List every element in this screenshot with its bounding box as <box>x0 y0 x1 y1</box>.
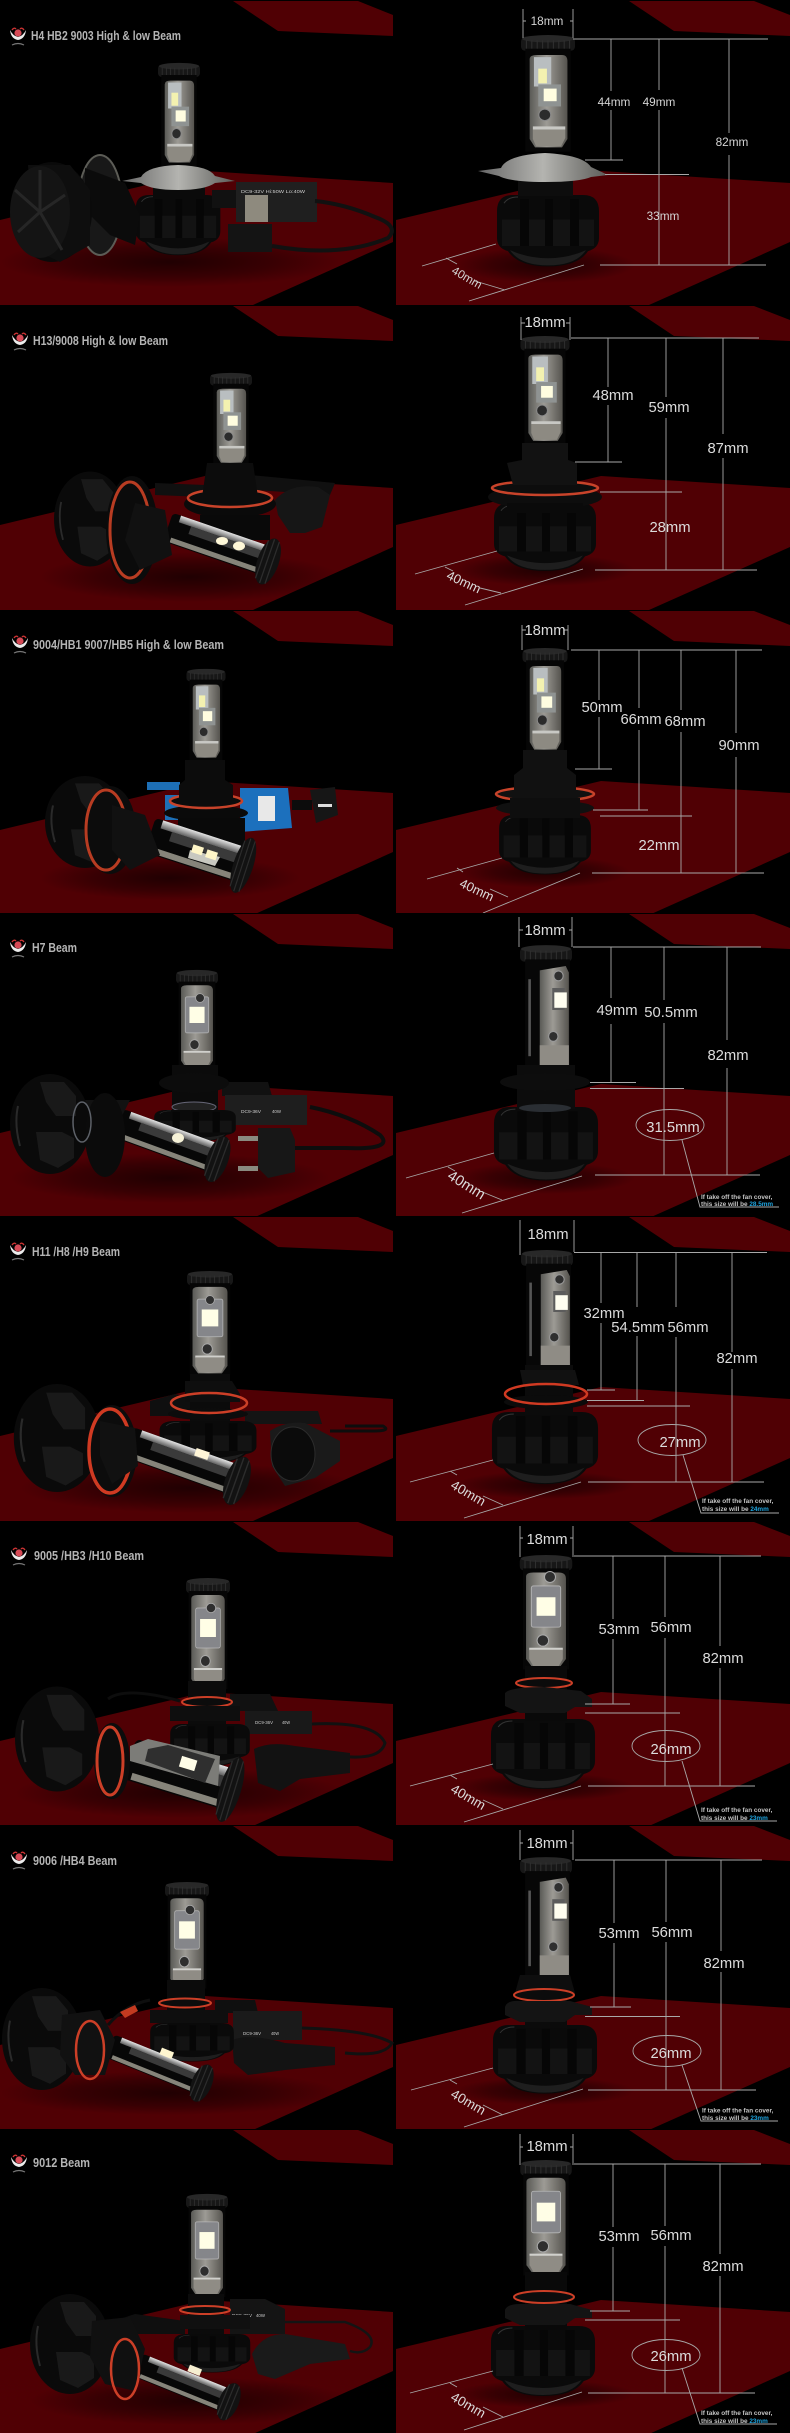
row 5 dimension lines and labels: 18mm <box>527 1227 569 1243</box>
row 5 dimension lines and labels <box>410 1220 779 1518</box>
row 4 dimension lines and labels: 31.5mm <box>646 1120 700 1136</box>
row 5 right background <box>393 1216 790 1521</box>
row 4 dimension lines and labels: 18mm <box>524 923 566 939</box>
row 4 dimension lines and labels <box>406 917 779 1213</box>
row 2 dimension lines and labels: 59mm <box>648 400 690 416</box>
row 3 heading <box>12 636 224 653</box>
row 7: 9006/HB4 <box>0 1825 790 2130</box>
row 3 dimension lines and labels: 66mm <box>620 712 662 728</box>
row 3 left background <box>0 610 393 915</box>
row 8 dimension lines and labels: 82mm <box>702 2259 744 2275</box>
row 7 dimension bulb <box>455 1857 635 2105</box>
row 1 dimension lines and labels: 49mm <box>643 95 676 109</box>
row 1 dimension lines and labels: 44mm <box>598 95 631 109</box>
row 1 dimension bulb <box>455 35 635 283</box>
row 6 product photo <box>15 1578 385 1825</box>
row 3 dimension lines and labels <box>427 623 764 913</box>
row 6 dimension lines and labels: 56mm <box>650 1620 692 1636</box>
row 2 dimension bulb <box>455 336 635 586</box>
row 5 dimension lines and labels: 32mm <box>583 1306 625 1322</box>
row 7 dimension lines and labels: If take off the fan cover, <box>702 2108 774 2114</box>
row 6 dimension bulb <box>455 1555 635 1801</box>
row 4 product photo <box>10 970 383 1203</box>
row 5 dimension lines and labels: 82mm <box>716 1351 758 1367</box>
row 5 dimension lines and labels: this size will be 24mm <box>702 1506 769 1513</box>
row 7 dimension lines and labels: 56mm <box>651 1925 693 1941</box>
row 8 left background <box>0 2129 393 2433</box>
row 4 heading <box>10 940 77 957</box>
row 8 dimension lines and labels: 26mm <box>650 2349 692 2365</box>
row 1 dimension lines and labels <box>422 9 768 301</box>
row 2 dimension lines and labels: 40mm <box>444 567 483 596</box>
row 1 dimension lines and labels: 33mm <box>647 209 680 223</box>
row 2 dimension lines and labels: 48mm <box>592 388 634 404</box>
row 4 dimension lines and labels: 82mm <box>707 1048 749 1064</box>
row 2 dimension lines and labels <box>415 315 759 605</box>
row 3 dimension lines and labels: 50mm <box>581 700 623 716</box>
row 3 dimension lines and labels: 40mm <box>457 875 496 904</box>
row 4 product photo: 40W <box>272 1109 282 1114</box>
row 3 dimension bulb <box>460 648 630 888</box>
row 3 right background <box>393 610 790 915</box>
row 6 dimension lines and labels: If take off the fan cover, <box>701 1807 773 1814</box>
row 8 dimension lines and labels: 56mm <box>650 2228 692 2244</box>
row 6 heading <box>11 1548 144 1565</box>
row 7 dimension lines and labels: this size will be 23mm <box>702 2115 769 2122</box>
row 5 heading <box>10 1243 120 1260</box>
row 7 right background <box>393 1825 790 2130</box>
row 8 product photo <box>30 2194 372 2425</box>
row 4 heading: H7 Beam <box>32 941 77 955</box>
row 6 dimension lines and labels: 26mm <box>650 1742 692 1758</box>
row 2 right background <box>393 305 790 610</box>
row 3 dimension lines and labels: 22mm <box>638 838 680 854</box>
row 5 dimension lines and labels: 56mm <box>667 1320 709 1336</box>
row 2 heading <box>12 333 168 350</box>
row 1 heading: H4 HB2 9003 High & low Beam <box>31 29 181 43</box>
row 1 product photo: bulbs, driver and plug: DC9-32V Hi:50W Lo:40W <box>241 189 306 194</box>
row 6 product photo: 40W <box>282 1720 291 1725</box>
row 7 left background <box>0 1825 393 2130</box>
row 2 heading: H13/9008 High & low Beam <box>33 334 168 348</box>
row 5 dimension bulb <box>455 1250 635 1499</box>
row 3 product photo <box>40 669 338 900</box>
row 7 dimension lines and labels <box>411 1830 778 2127</box>
row 6 product photo: DC9-36V <box>255 1720 274 1725</box>
row 8 dimension lines and labels <box>410 2134 777 2430</box>
row 8 dimension lines and labels: 53mm <box>598 2229 640 2245</box>
row 6 dimension lines and labels: 53mm <box>598 1622 640 1638</box>
row 4 dimension lines and labels: 40mm <box>444 1168 488 1203</box>
row 6 dimension lines and labels: 82mm <box>702 1651 744 1667</box>
row 4 dimension lines and labels: 49mm <box>596 1003 638 1019</box>
row 2: H13/9008 <box>0 305 790 610</box>
top edge sliver <box>0 0 233 1</box>
row 1 right background <box>393 0 790 305</box>
row 6 dimension lines and labels: 18mm <box>526 1532 568 1548</box>
row 1 dimension lines and labels: 82mm <box>716 135 749 149</box>
row 5 dimension lines and labels: 40mm <box>448 1477 488 1509</box>
row 7 heading <box>11 1852 117 1869</box>
row 7 product photo: 40W <box>271 2031 280 2036</box>
row 7 product photo: DC9-36V <box>243 2031 262 2036</box>
row 7 heading: 9006 /HB4 Beam <box>33 1854 117 1868</box>
row 5 dimension lines and labels: 27mm <box>659 1435 701 1451</box>
row 5 dimension lines and labels: 54.5mm <box>611 1320 665 1336</box>
row 4: H7 <box>0 913 790 1218</box>
row 7 dimension lines and labels: 53mm <box>598 1926 640 1942</box>
row 4 dimension bulb <box>455 945 635 1194</box>
row 6 dimension lines and labels: 40mm <box>448 1781 488 1813</box>
row 2 dimension lines and labels: 87mm <box>707 441 749 457</box>
row 1 dimension lines and labels: 18mm <box>531 14 564 28</box>
row 3 dimension lines and labels: 90mm <box>718 738 760 754</box>
row 5 product photo <box>14 1271 386 1513</box>
row 8 dimension bulb <box>455 2160 635 2408</box>
row 8 dimension lines and labels: this size will be 23mm <box>701 2418 768 2425</box>
row 8 heading <box>11 2155 90 2172</box>
row 4 dimension lines and labels: If take off the fan cover, <box>701 1194 773 1201</box>
row 6 dimension lines and labels: this size will be 23mm <box>701 1815 768 1822</box>
row 8: 9012 <box>0 2129 790 2433</box>
row 7 dimension lines and labels: 40mm <box>448 2086 488 2118</box>
row 4 right background <box>393 913 790 1218</box>
row 7 dimension lines and labels: 26mm <box>650 2046 692 2062</box>
row 2 dimension lines and labels: 28mm <box>649 520 691 536</box>
row 8 dimension lines and labels: 18mm <box>526 2139 568 2155</box>
row 1 dimension lines and labels: 40mm <box>449 263 485 292</box>
row 3: 9004/HB1 9007/HB5 <box>0 610 790 915</box>
row 4 dimension lines and labels: 50.5mm <box>644 1005 698 1021</box>
row 8 product photo: DC9-36V <box>232 2313 253 2318</box>
row 5 left background <box>0 1216 393 1521</box>
row 3 dimension lines and labels: 68mm <box>664 714 706 730</box>
row 8 dimension lines and labels: 40mm <box>448 2389 488 2421</box>
row 5 dimension lines and labels: If take off the fan cover, <box>702 1498 774 1505</box>
row 6 left background <box>0 1521 393 1826</box>
row 1: H4 HB2 9003 <box>0 0 790 305</box>
row 1 left background <box>0 0 393 305</box>
row 4 product photo: DC9-36V <box>241 1109 262 1114</box>
row 2 product photo <box>40 373 340 602</box>
row 7 product photo <box>0 1882 392 2115</box>
row 3 dimension lines and labels: 18mm <box>524 623 566 639</box>
row 2 left background <box>0 305 393 610</box>
row 8 product photo: 40W <box>256 2313 266 2318</box>
row 7 dimension lines and labels: 18mm <box>526 1836 568 1852</box>
row 6 right background <box>393 1521 790 1826</box>
row 5 heading: H11 /H8 /H9 Beam <box>32 1245 120 1259</box>
row 6: 9005/HB3/H10 <box>0 1521 790 1826</box>
row 5: H11/H8/H9 <box>0 1216 790 1521</box>
row 8 heading: 9012 Beam <box>33 2156 90 2170</box>
row 6 heading: 9005 /HB3 /H10 Beam <box>34 1549 144 1563</box>
row 3 heading: 9004/HB1 9007/HB5 High & low Beam <box>33 638 224 652</box>
row 1 product photo: bulbs, driver and plug <box>0 63 392 287</box>
row 8 dimension lines and labels: If take off the fan cover, <box>701 2410 773 2417</box>
row 6 dimension lines and labels <box>410 1526 777 1822</box>
row 1 heading <box>10 28 181 45</box>
row 8 right background <box>393 2129 790 2433</box>
row 7 dimension lines and labels: 82mm <box>703 1956 745 1972</box>
row 2 dimension lines and labels: 18mm <box>524 315 566 331</box>
row 4 dimension lines and labels: this size will be 28.5mm <box>701 1201 773 1208</box>
row 4 left background <box>0 913 393 1218</box>
